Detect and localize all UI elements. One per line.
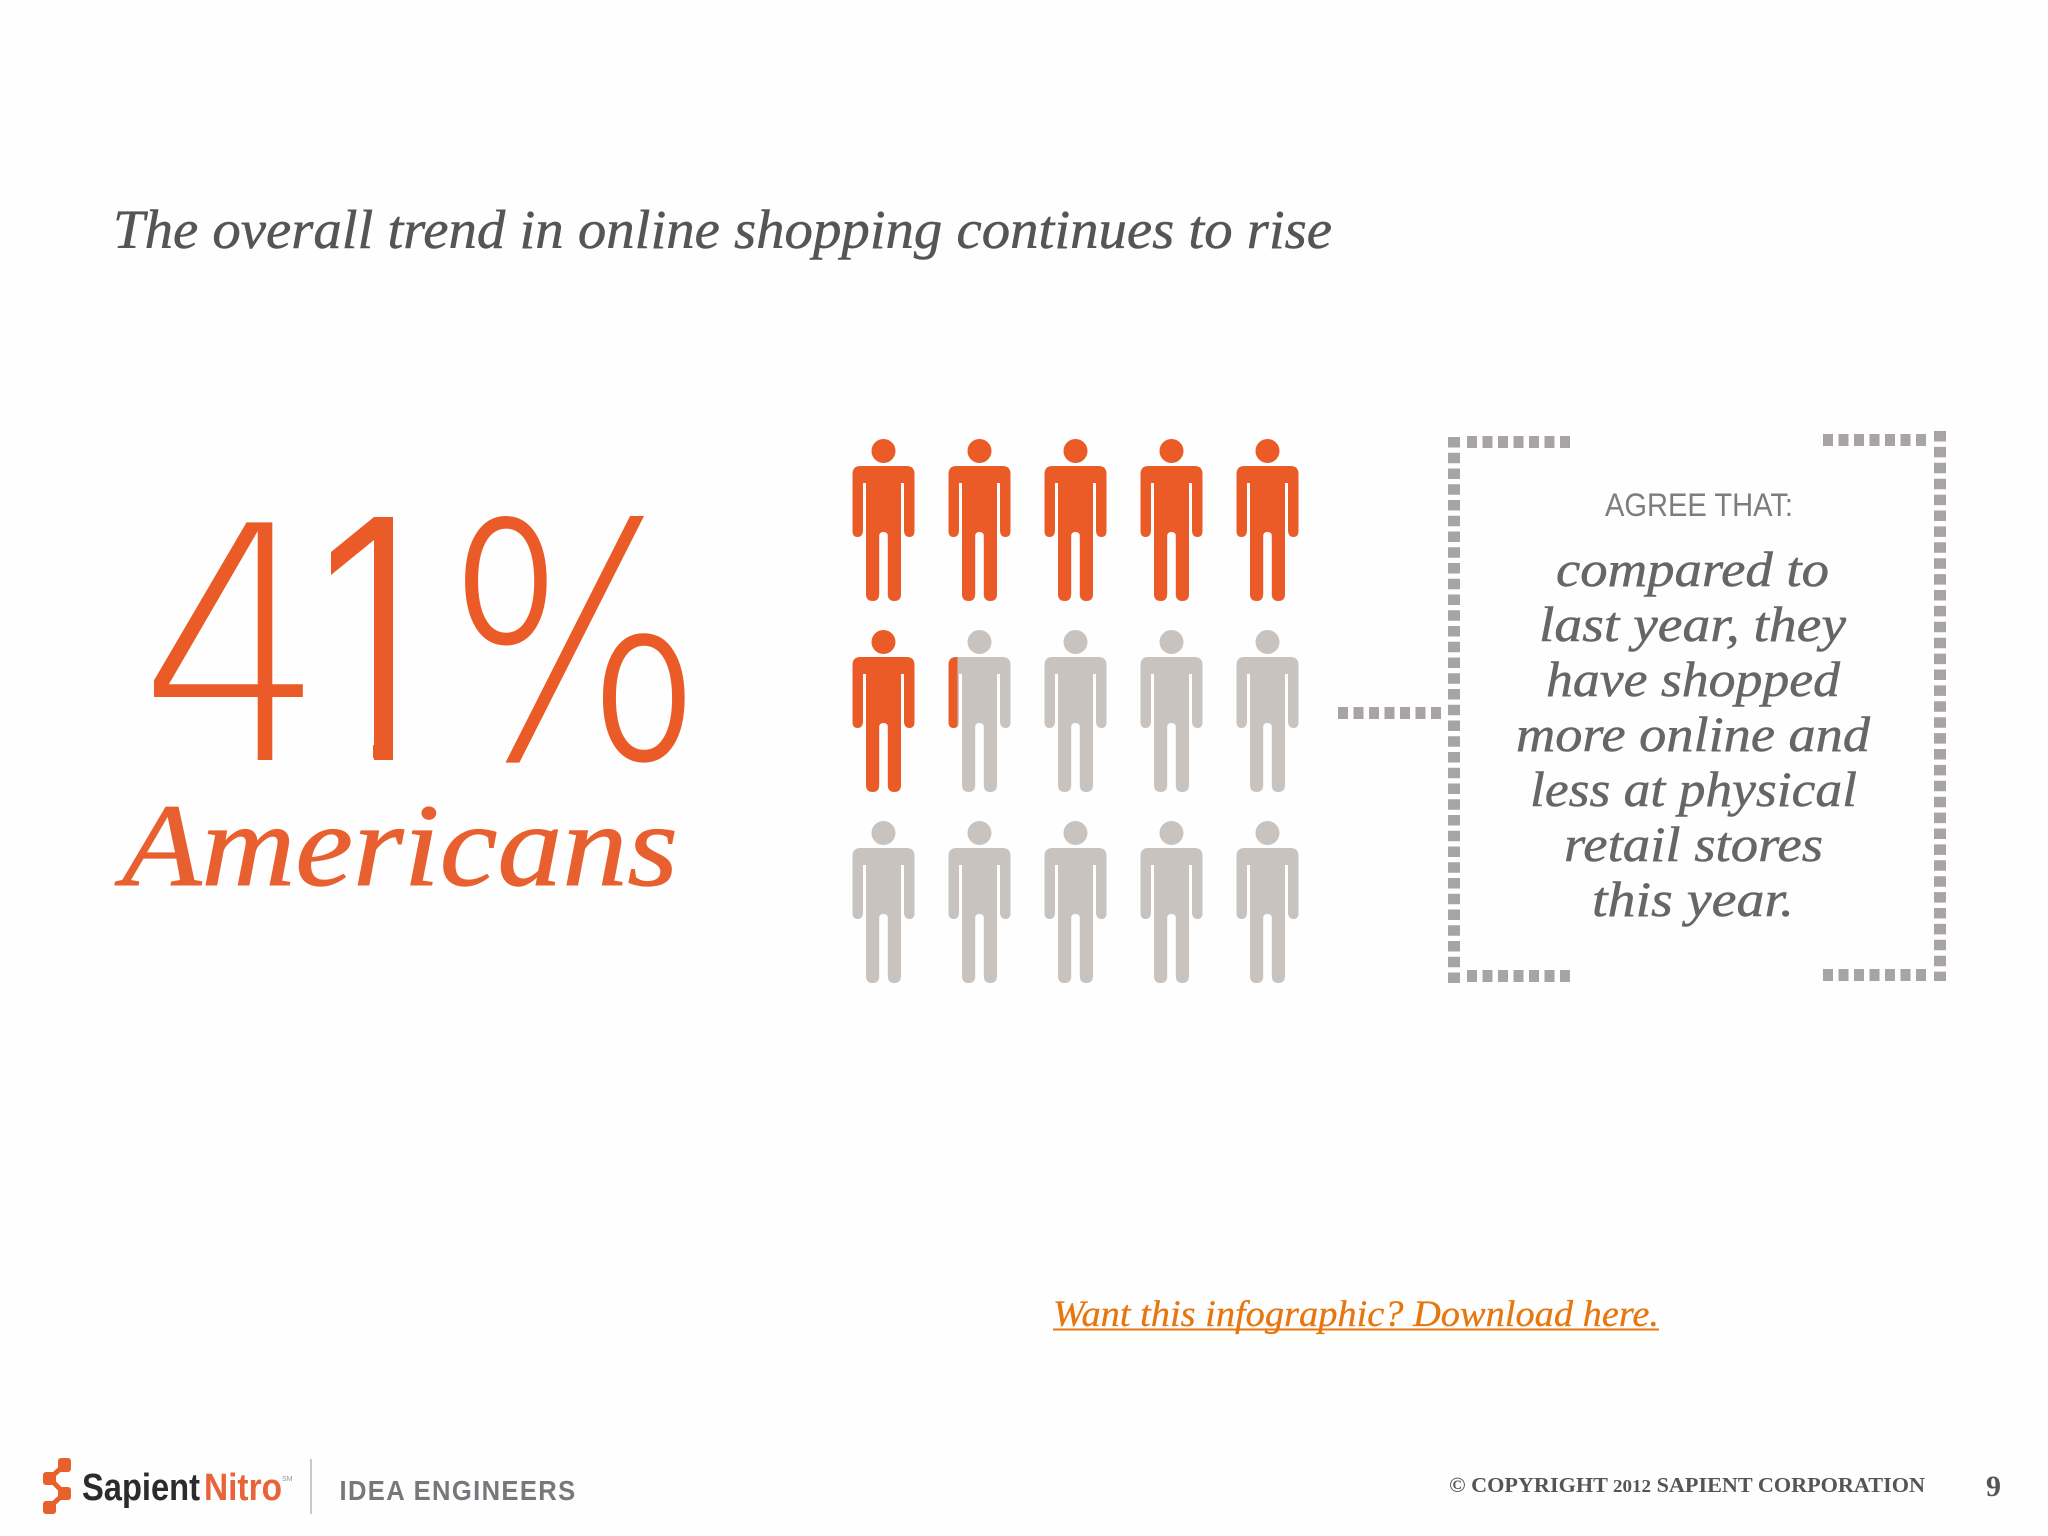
statistic number: 41% (140, 456, 705, 838)
row 2: one orange, one partial, three grey (852, 630, 1298, 792)
row 3: grey people (852, 821, 1298, 983)
callout text (1516, 541, 1871, 927)
statistic label: Americans: Americans (114, 780, 678, 911)
statistic number: 41%: 1 (294, 460, 466, 835)
callout text: last year, they (1539, 596, 1847, 652)
big statistic: 41% Americans (114, 456, 705, 911)
dotted bracket frame (1454, 431, 1940, 983)
callout heading: AGREE THAT: AGREE THAT: (1605, 487, 1793, 523)
logo: SapientNitro (43, 1458, 293, 1514)
icon: logo mark (43, 1458, 71, 1514)
statistic number: 41%: % (445, 456, 705, 835)
footer copyright: © COPYRIGHT 2012 SAPIENT CORPORATION (1449, 1473, 1925, 1497)
connector: dotted line from people to bracket (1338, 707, 1441, 719)
callout text: have shopped (1546, 651, 1841, 707)
page number: 9 (1986, 1470, 2001, 1503)
logo wordmark: Nitro (204, 1467, 282, 1509)
download link: Want this infographic? Download here. (1053, 1294, 1659, 1335)
callout text: this year. (1592, 871, 1794, 927)
title: The overall trend in online shopping continues to rise (113, 199, 1332, 260)
divider (310, 1459, 312, 1514)
callout text: more online and (1516, 706, 1871, 762)
service mark: SM (282, 1476, 293, 1483)
callout text: compared to (1556, 541, 1829, 597)
statistic number: 41%: 4 (140, 458, 326, 838)
pictogram: people, 41 percent highlighted (852, 439, 1298, 983)
row 1: orange people (852, 439, 1298, 601)
logo wordmark: Sapient (82, 1467, 200, 1509)
callout text: less at physical (1530, 761, 1857, 817)
tagline: IDEA ENGINEERS: IDEA ENGINEERS (340, 1475, 576, 1506)
callout text: retail stores (1564, 816, 1823, 872)
